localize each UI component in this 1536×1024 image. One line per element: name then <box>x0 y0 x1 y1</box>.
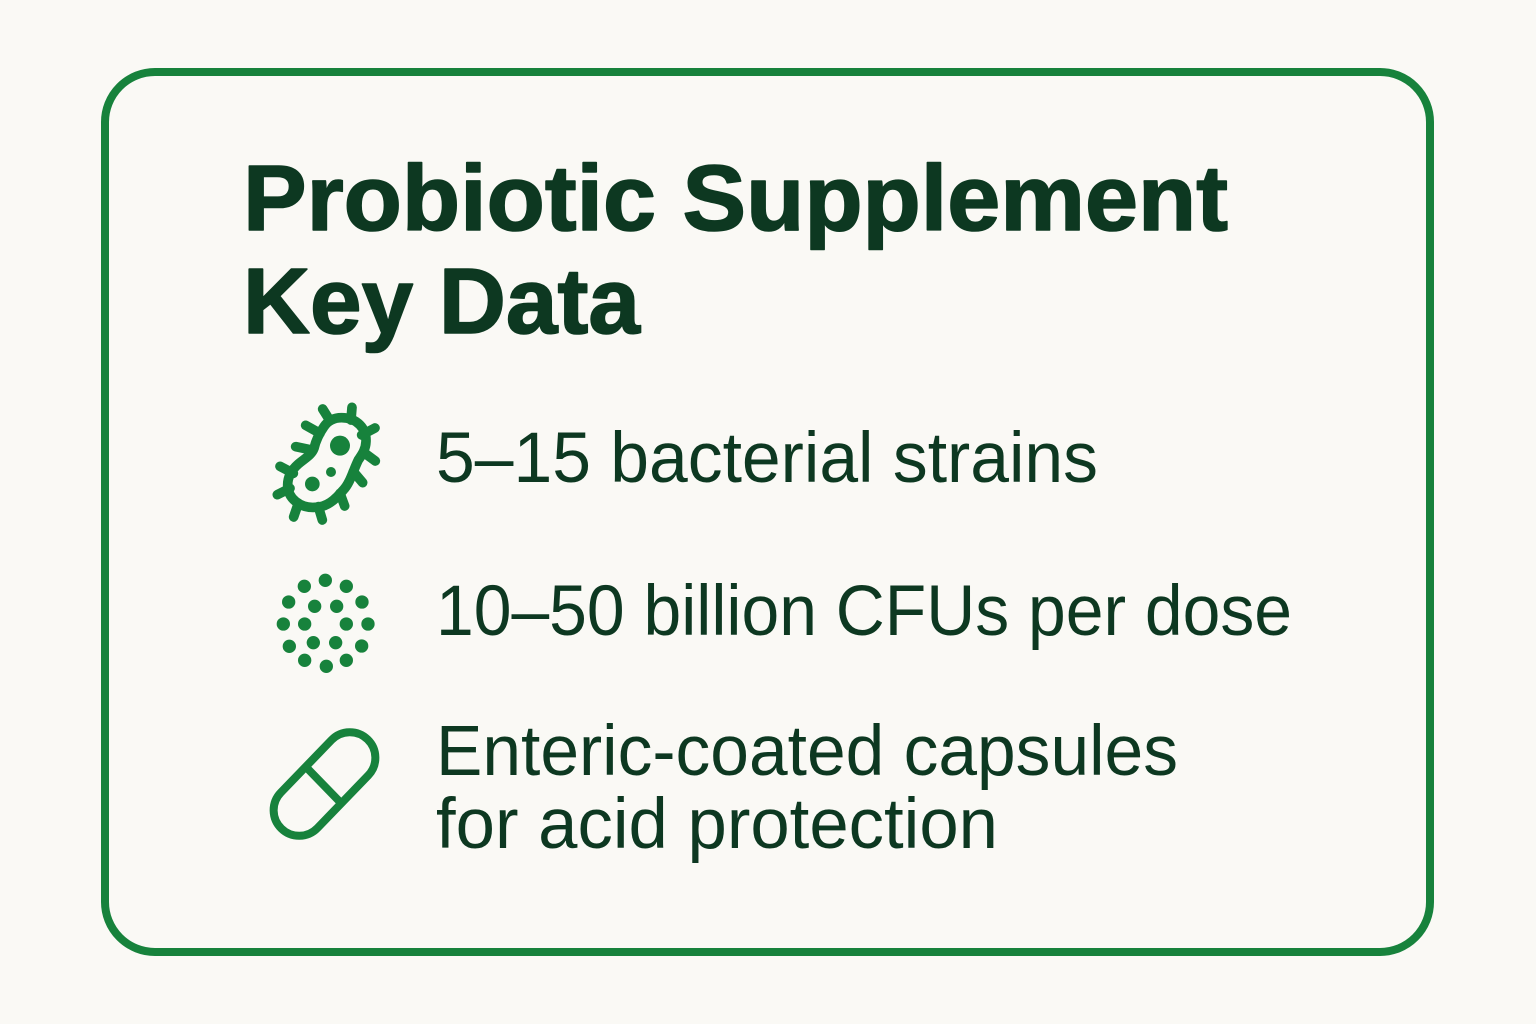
title <box>243 146 1228 353</box>
panel: key data card <box>105 72 1430 952</box>
text: enteric-coated capsules: Enteric-coated capsules <box>436 712 1178 791</box>
text: bacterial strains: 5–15 bacterial strains <box>436 419 1098 498</box>
icon: CFU dots <box>277 574 375 673</box>
icon: capsule <box>263 722 386 846</box>
text: enteric-coated capsules <box>436 712 1178 864</box>
title: Key Data <box>243 249 641 353</box>
icon: bacterium <box>277 407 375 520</box>
text: enteric-coated capsules: for acid protection <box>436 785 998 864</box>
text: CFUs per dose: 10–50 billion CFUs per dose <box>436 572 1292 651</box>
title: Probiotic Supplement <box>243 146 1228 250</box>
